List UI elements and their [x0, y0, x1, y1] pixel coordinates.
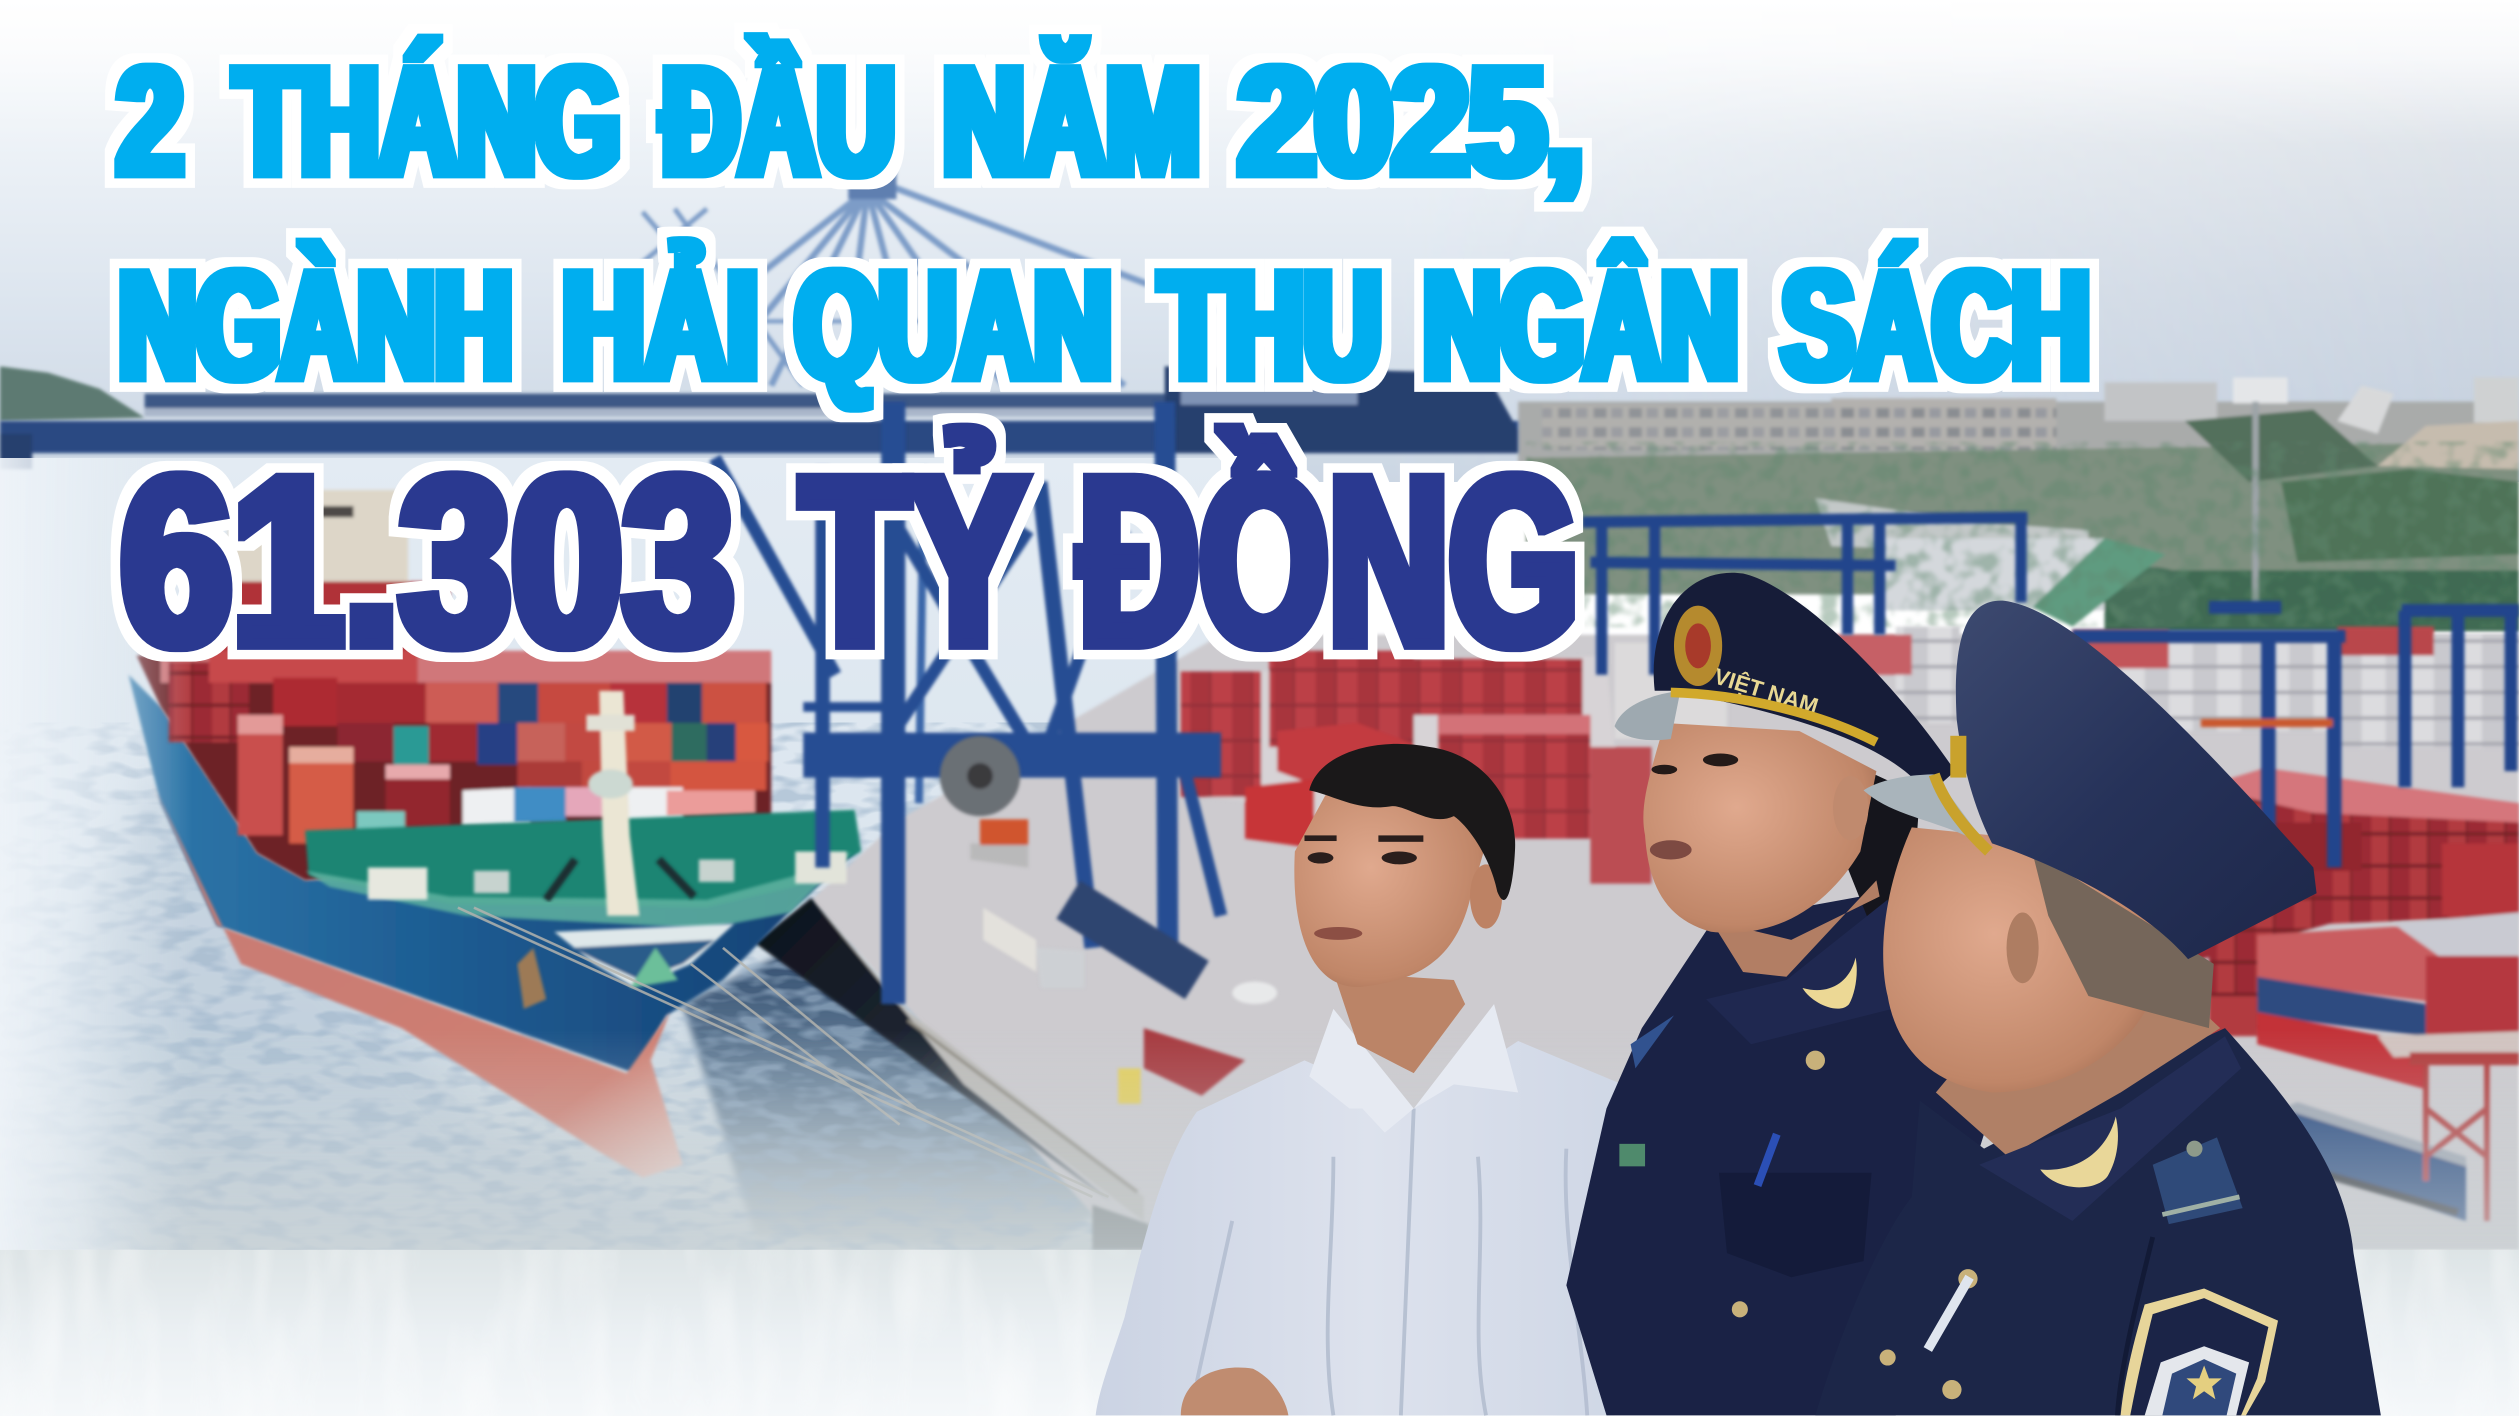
face: [1643, 723, 1876, 933]
right customs officer: [1815, 601, 2381, 1415]
title line 1: ĐẦU: [662, 34, 895, 207]
shoulder stripe: [2162, 1197, 2239, 1215]
port yard ground: [811, 635, 2519, 1250]
left side fold of uniform: [1631, 1015, 1674, 1068]
title line 2: NGÀNH: [119, 238, 512, 411]
collar: [1706, 900, 1892, 1044]
mast: [586, 691, 639, 916]
collar wing badge: [2040, 1117, 2118, 1187]
uniform buttons: [1880, 1269, 1978, 1399]
collar: [1309, 1004, 1518, 1133]
strap pin: [2186, 1141, 2203, 1157]
title line 3: total revenue figure: TỶ: [801, 427, 1027, 696]
quay crane lattice: [610, 161, 1414, 386]
middle customs officer: [1566, 573, 1992, 1415]
red bottom paint: [153, 784, 683, 1178]
main quay crane structure: [715, 402, 1221, 1004]
shoulder strap: [2153, 1137, 2243, 1224]
title line 1: 2: [117, 34, 183, 207]
title line 2: NGÂN: [1423, 238, 1738, 411]
far hills and town: [0, 366, 2519, 631]
uniform buttons: [1732, 1051, 1825, 1317]
neck: [1711, 880, 1880, 977]
anchor: [517, 948, 546, 1009]
arm badge: Hải quan Việt Nam: [2121, 1288, 2278, 1415]
cargo containers: [137, 651, 771, 880]
collar wing badge: [1802, 957, 1857, 1009]
facial features: [1650, 753, 1738, 859]
man in white shirt: [1096, 744, 1642, 1415]
ship bridge superstructure: [209, 490, 450, 655]
title line 2: SÁCH: [1782, 238, 2090, 411]
title line 1: 2025,: [1239, 34, 1584, 207]
bow emblem: [554, 924, 734, 988]
pen: [1758, 1134, 1777, 1186]
title line 2: THU: [1160, 238, 1382, 411]
sky: [0, 51, 2519, 482]
shirt folds: [1197, 1109, 1587, 1415]
cap text: VIỆT NAM: [1711, 664, 1821, 719]
yard vehicles: [970, 819, 1277, 1104]
teal forecastle: [305, 810, 861, 908]
crane boom: [0, 366, 1518, 469]
ear: [1470, 864, 1502, 929]
hair: [2032, 851, 2214, 1028]
collar: [1979, 1036, 2241, 1221]
title line 1: [117, 34, 1584, 207]
fade of lower photo: [0, 1028, 2519, 1253]
name tag: [1619, 1144, 1645, 1166]
cap visor and gold band: [1864, 774, 1989, 848]
pen in pocket: [1928, 1277, 1970, 1349]
title line 1: THÁNG: [235, 34, 620, 207]
title line 3: total revenue figure: ĐỒNG: [1079, 427, 1578, 696]
shirt: [1096, 1041, 1642, 1415]
ear: [1833, 776, 1868, 840]
title block: [117, 34, 2090, 696]
quay edge: [755, 898, 1149, 1250]
uniform: [1566, 892, 1992, 1415]
neck: [1333, 972, 1465, 1073]
chest pocket: [1719, 1173, 1872, 1277]
hair behind ear: [1815, 747, 1920, 948]
title line 3: total revenue figure: [120, 427, 1578, 696]
neck: [1936, 980, 2220, 1157]
title line 1: NĂM: [943, 34, 1200, 207]
water: [0, 458, 1221, 1253]
container stacks: right yard: [1960, 627, 2519, 1221]
cap crown: [1654, 573, 1955, 795]
cap crown: [1956, 601, 2317, 959]
container ship: [129, 490, 861, 1178]
ear: [2007, 913, 2039, 983]
eyes and mouth: [1304, 835, 1423, 940]
arm seam: [2117, 1237, 2153, 1415]
face: [1883, 827, 2161, 1092]
lower water reflection: [0, 1250, 2519, 1416]
hair: [1309, 744, 1515, 900]
face: [1294, 787, 1486, 987]
crane gear wheel: [940, 736, 1020, 816]
title line 2: QUAN: [795, 238, 1112, 411]
title line 2: [119, 238, 2090, 411]
cap visor and gold band: [1615, 691, 1680, 740]
title line 2: HẢI: [562, 238, 758, 411]
container stacks: mid yard: [1181, 627, 1960, 884]
distant blue gantry cranes: [1582, 517, 2519, 868]
cap emblem: [1674, 606, 1722, 686]
title line 3: total revenue figure: 61.303: [120, 427, 734, 696]
deck equipment: [368, 851, 847, 900]
mooring ropes: [458, 908, 1108, 1197]
uniform: [1815, 1028, 2381, 1415]
hand: [1181, 1368, 1288, 1415]
hull: [129, 675, 859, 1073]
